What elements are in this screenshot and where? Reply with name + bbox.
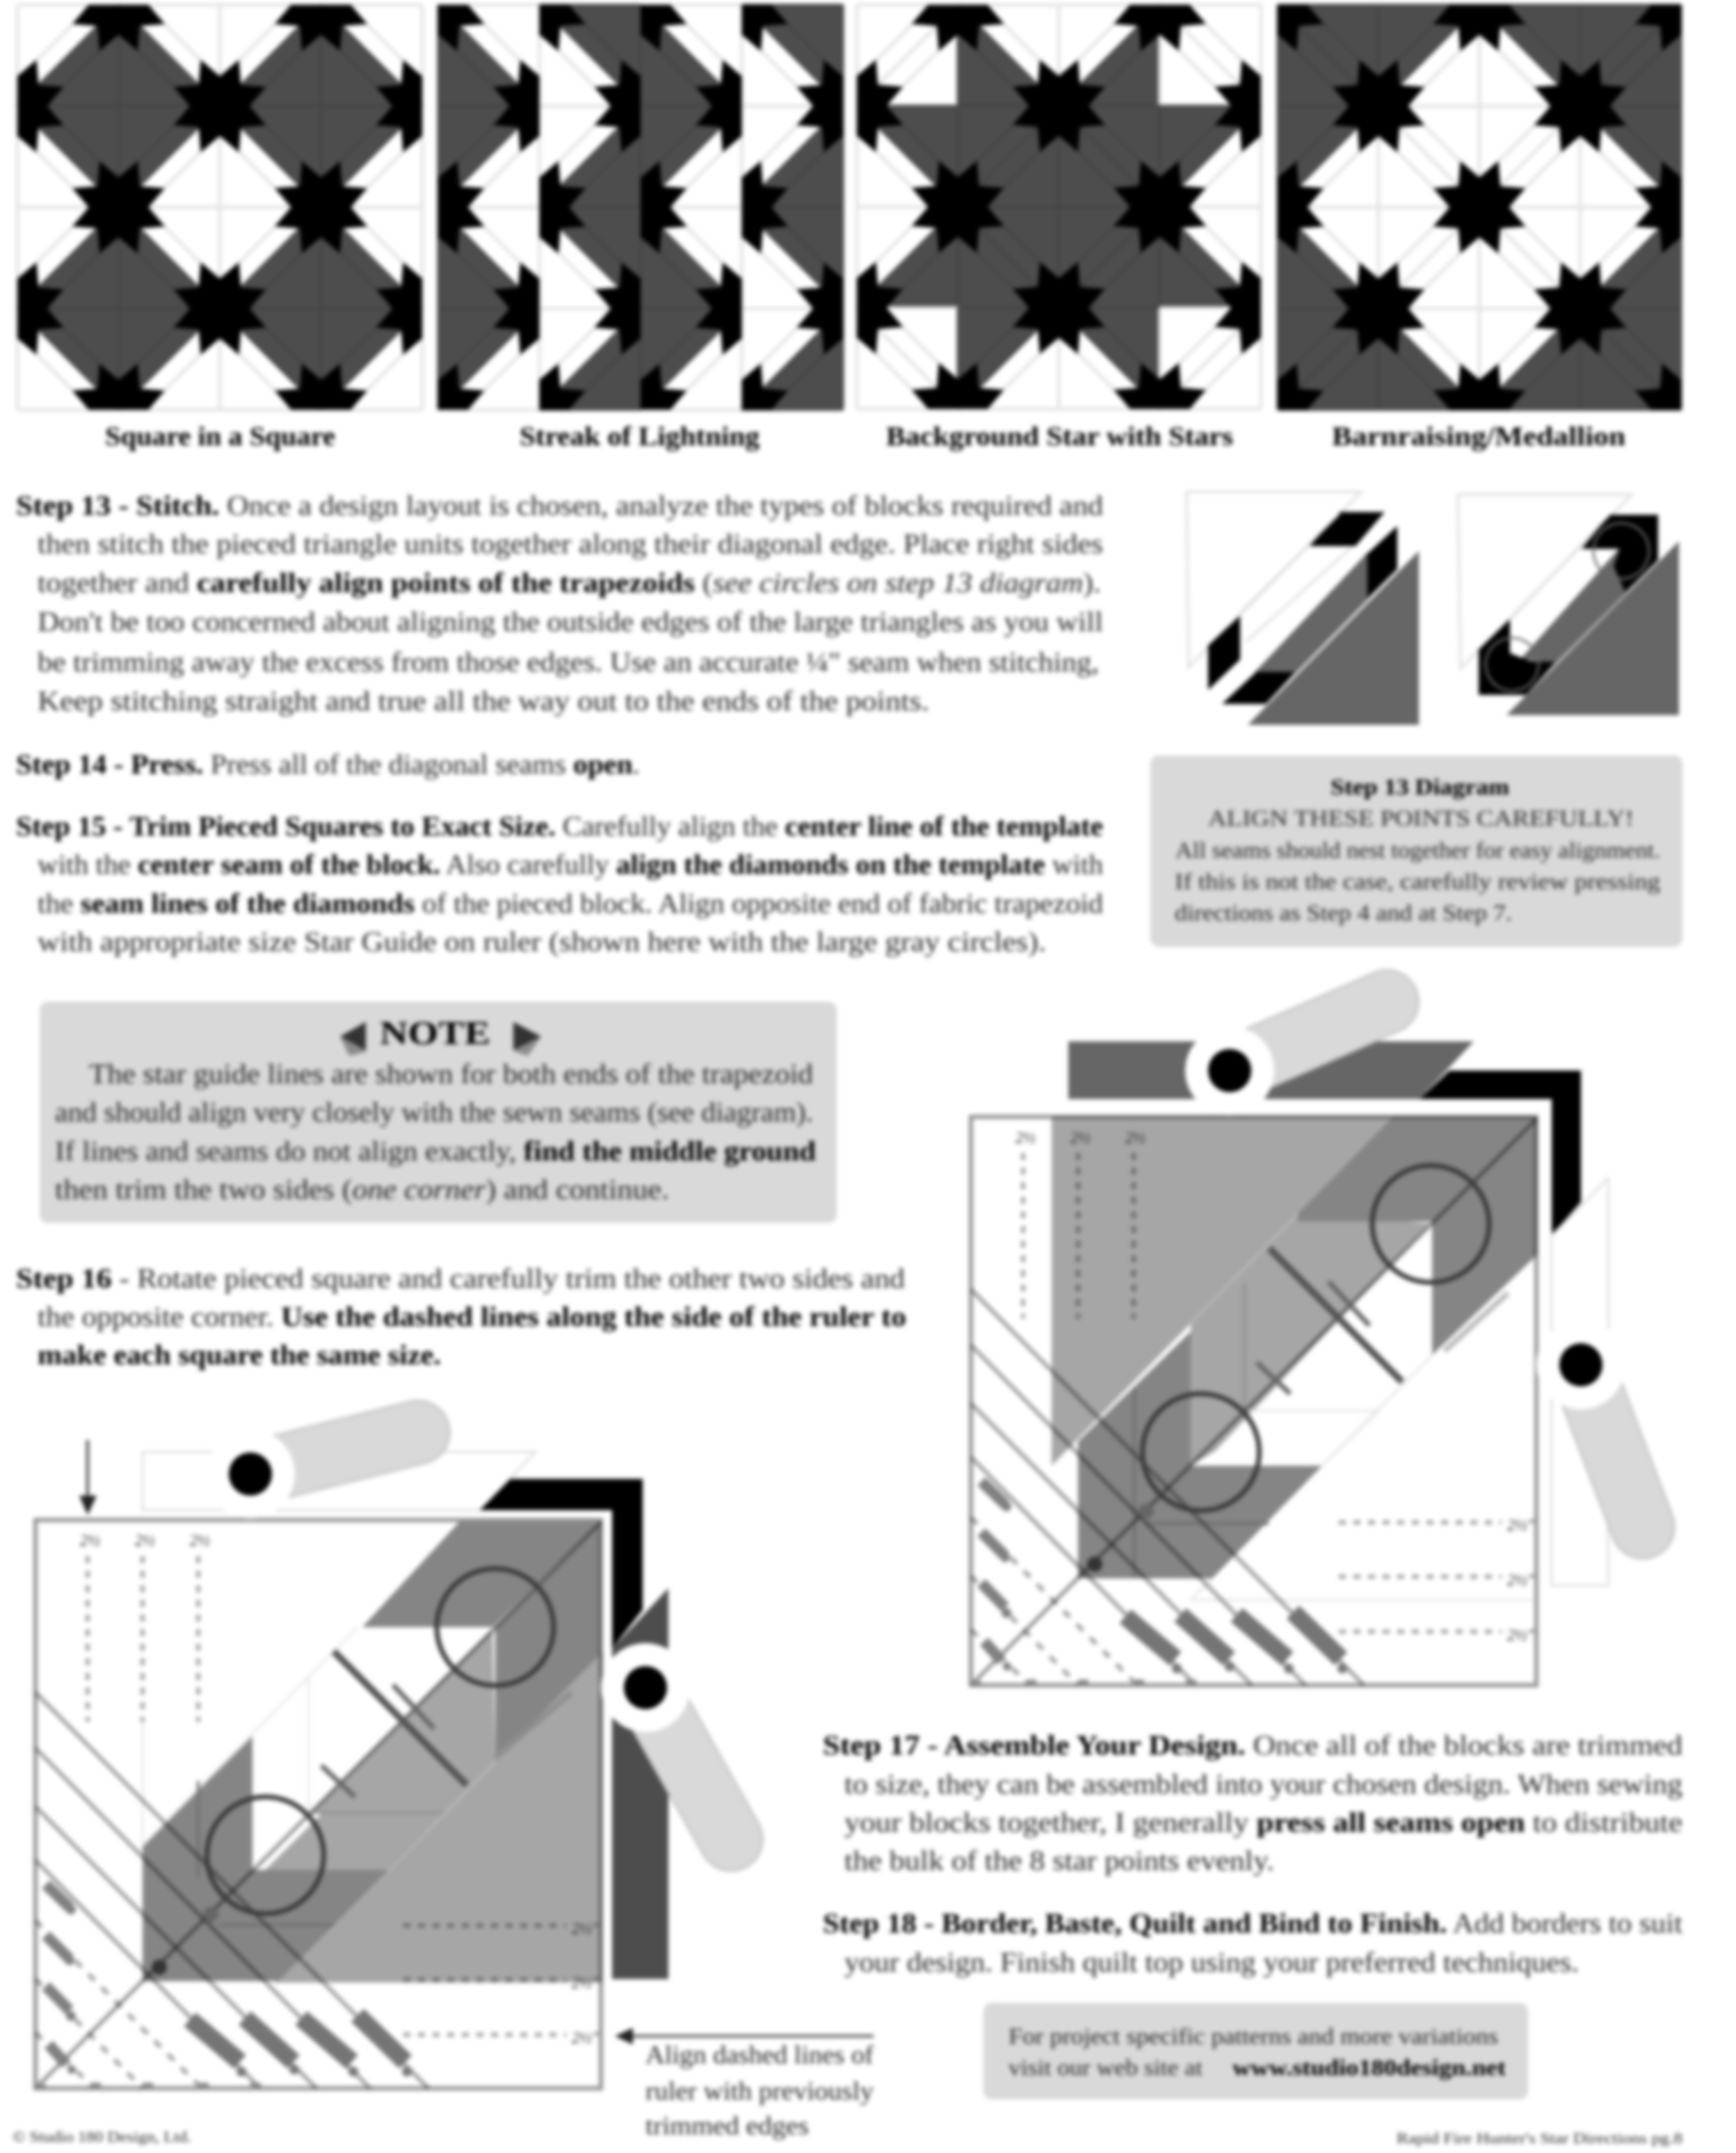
diagram: step 13 units aligned, right: [1458, 495, 1679, 715]
text block: step 18: your design. Finish quilt top using your preferred techniques.: [844, 1946, 1579, 1978]
text block: step 15: Step 15 - Trim Pieced Squares to Exact Size. Carefully align the center line of the template: [16, 810, 1103, 842]
ruler with guide lines: 2½": [572, 2029, 599, 2047]
ruler with guide lines: 2½": [1507, 1571, 1534, 1589]
layout captions: [105, 422, 1625, 451]
callout: note: The star guide lines are shown for both ends of the trapezoid: [89, 1058, 813, 1089]
diagram: trimming with ruler, white side up: [35, 1430, 731, 2088]
arrow: down to ruler edge: [79, 1440, 97, 1515]
callout: step 13 diagram: Step 13 Diagram: [1331, 775, 1509, 800]
text block: step 15: the seam lines of the diamonds of the pieced block. Align opposite end of fabric trapezoid: [38, 888, 1103, 919]
ruler with guide lines: 2½: [135, 1532, 155, 1549]
rotary cutter, right: [601, 1643, 731, 1839]
ruler with guide lines: 2½: [190, 1532, 210, 1549]
fabric layers behind the ruler: [1052, 1041, 1608, 1600]
callout: web site: visit our web site at: [1008, 2056, 1203, 2081]
ruler with guide lines: 2½": [1507, 1516, 1534, 1534]
ruler with guide lines: 2½: [80, 1532, 100, 1549]
text block: step 16: the opposite corner. Use the dashed lines along the side of the ruler to: [38, 1301, 906, 1332]
text block: step 18: [823, 1907, 1682, 1978]
callout: note: [40, 1002, 837, 1223]
ruler with guide lines: 2½": [572, 1974, 599, 1992]
text block: step 17: to size, they can be assembled into your chosen design. When sewing: [844, 1768, 1682, 1800]
rotary cutter, top: [1185, 1002, 1387, 1115]
ruler with guide lines: 2½": [1507, 1626, 1534, 1644]
callout: step 13 diagram: directions as Step 4 and at Step 7.: [1175, 901, 1512, 926]
text block: step 16: make each square the same size.: [38, 1339, 441, 1370]
callout: web site: www.studio180design.net: [1232, 2056, 1506, 2081]
layout captions: Barnraising/Medallion: [1332, 422, 1625, 451]
text block: step 17: Step 17 - Assemble Your Design. Once all of the blocks are trimmed: [823, 1729, 1682, 1761]
callout: note: and should align very closely with the sewn seams (see diagram).: [55, 1096, 813, 1128]
text block: step 17: the bulk of the 8 star points evenly.: [844, 1845, 1274, 1876]
rotary cutter, right: [1536, 1320, 1643, 1527]
ruler with guide lines: [971, 1117, 1536, 1685]
callout: note: then trim the two sides ( one corner ) and continue.: [55, 1174, 669, 1205]
text block: step 13: Don't be too concerned about aligning the outside edges of the large triangles as you will: [38, 606, 1103, 637]
diagram: step 13 units aligned, left: [1187, 492, 1419, 725]
callout: web site: For project specific patterns and more variations: [1008, 2024, 1498, 2049]
callout: step 13 diagram: All seams should nest together for easy alignment.: [1175, 838, 1660, 863]
text block: step 15: with the center seam of the block. Also carefully align the diamonds on the template with: [38, 849, 1103, 880]
callout: step 13 diagram: ALIGN THESE POINTS CAREFULLY!: [1208, 806, 1634, 831]
layout captions: Background Star with Stars: [886, 422, 1233, 451]
text block: step 16: [16, 1263, 906, 1370]
text block: step 14: Step 14 - Press. Press all of the diagonal seams open.: [16, 749, 640, 780]
callout: step 13 diagram: [1150, 755, 1682, 947]
text block: step 16: Step 16 - Rotate pieced square and carefully trim the other two sides and: [16, 1263, 905, 1294]
diagram: trimming with ruler, dark side up: [971, 1002, 1643, 1685]
callout: step 13 diagram: If this is not the case, carefully review pressing: [1175, 870, 1660, 895]
annotation: align dashed lines: trimmed edges: [645, 2112, 809, 2140]
text block: step 13: together and carefully align points of the trapezoids (see circles on step 13 diagram ).: [38, 567, 1101, 598]
arrow: to dashed line: [615, 2028, 874, 2044]
footer: page reference: Rapid Fire Hunter's Star Directions pg.8: [1397, 2129, 1682, 2147]
rotary cutter, top: [206, 1430, 418, 1519]
text block: step 15: with appropriate size Star Guide on ruler (shown here with the large gray circles).: [38, 926, 1046, 957]
text block: step 13: be trimming away the excess from those edges. Use an accurate ¼" seam when stitching,: [38, 646, 1099, 678]
ruler with guide lines: 2½: [1015, 1129, 1036, 1146]
quilt layout: Streak of Lightning: [392, 0, 889, 456]
text block: step 13: then stitch the pieced triangle units together along their diagonal edge. Place right sides: [38, 528, 1103, 559]
text block: step 17: [823, 1729, 1682, 1876]
annotation: align dashed lines: Align dashed lines of: [645, 2041, 874, 2070]
annotation: align dashed lines: ruler with previously: [645, 2077, 874, 2106]
callout: web site: [983, 2003, 1528, 2099]
text block: step 15: [16, 810, 1103, 957]
text block: step 17: your blocks together, I generally press all seams open to distribute: [844, 1807, 1682, 1838]
layout captions: Square in a Square: [105, 422, 335, 451]
quilt layout: Background Star with Stars: [811, 0, 1307, 455]
text block: step 13: Step 13 - Stitch. Once a design layout is chosen, analyze the types of blocks required and: [16, 490, 1103, 521]
text block: step 13: [16, 490, 1103, 717]
quilt layout: Barnraising / Medallion: [1232, 0, 1727, 456]
fabric layers behind the ruler: [143, 1452, 668, 1981]
text block: step 18: Step 18 - Border, Baste, Quilt and Bind to Finish. Add borders to suit: [823, 1907, 1682, 1939]
ruler with guide lines: 2½: [1070, 1129, 1091, 1146]
annotation: align dashed lines: [645, 2041, 874, 2140]
text block: step 13: Keep stitching straight and true all the way out to the ends of the points.: [38, 685, 929, 717]
ruler with guide lines: 2½": [572, 1920, 599, 1937]
footer: copyright: © Studio 180 Design, Ltd.: [13, 2128, 191, 2145]
ruler with guide lines: 2½: [1125, 1129, 1146, 1146]
quilt layout: Square in a Square: [0, 0, 469, 456]
ruler with guide lines: [35, 1520, 601, 2088]
callout: note: NOTE: [380, 1015, 490, 1052]
layout captions: Streak of Lightning: [520, 422, 760, 451]
callout: note: If lines and seams do not align exactly, find the middle ground: [55, 1135, 816, 1167]
